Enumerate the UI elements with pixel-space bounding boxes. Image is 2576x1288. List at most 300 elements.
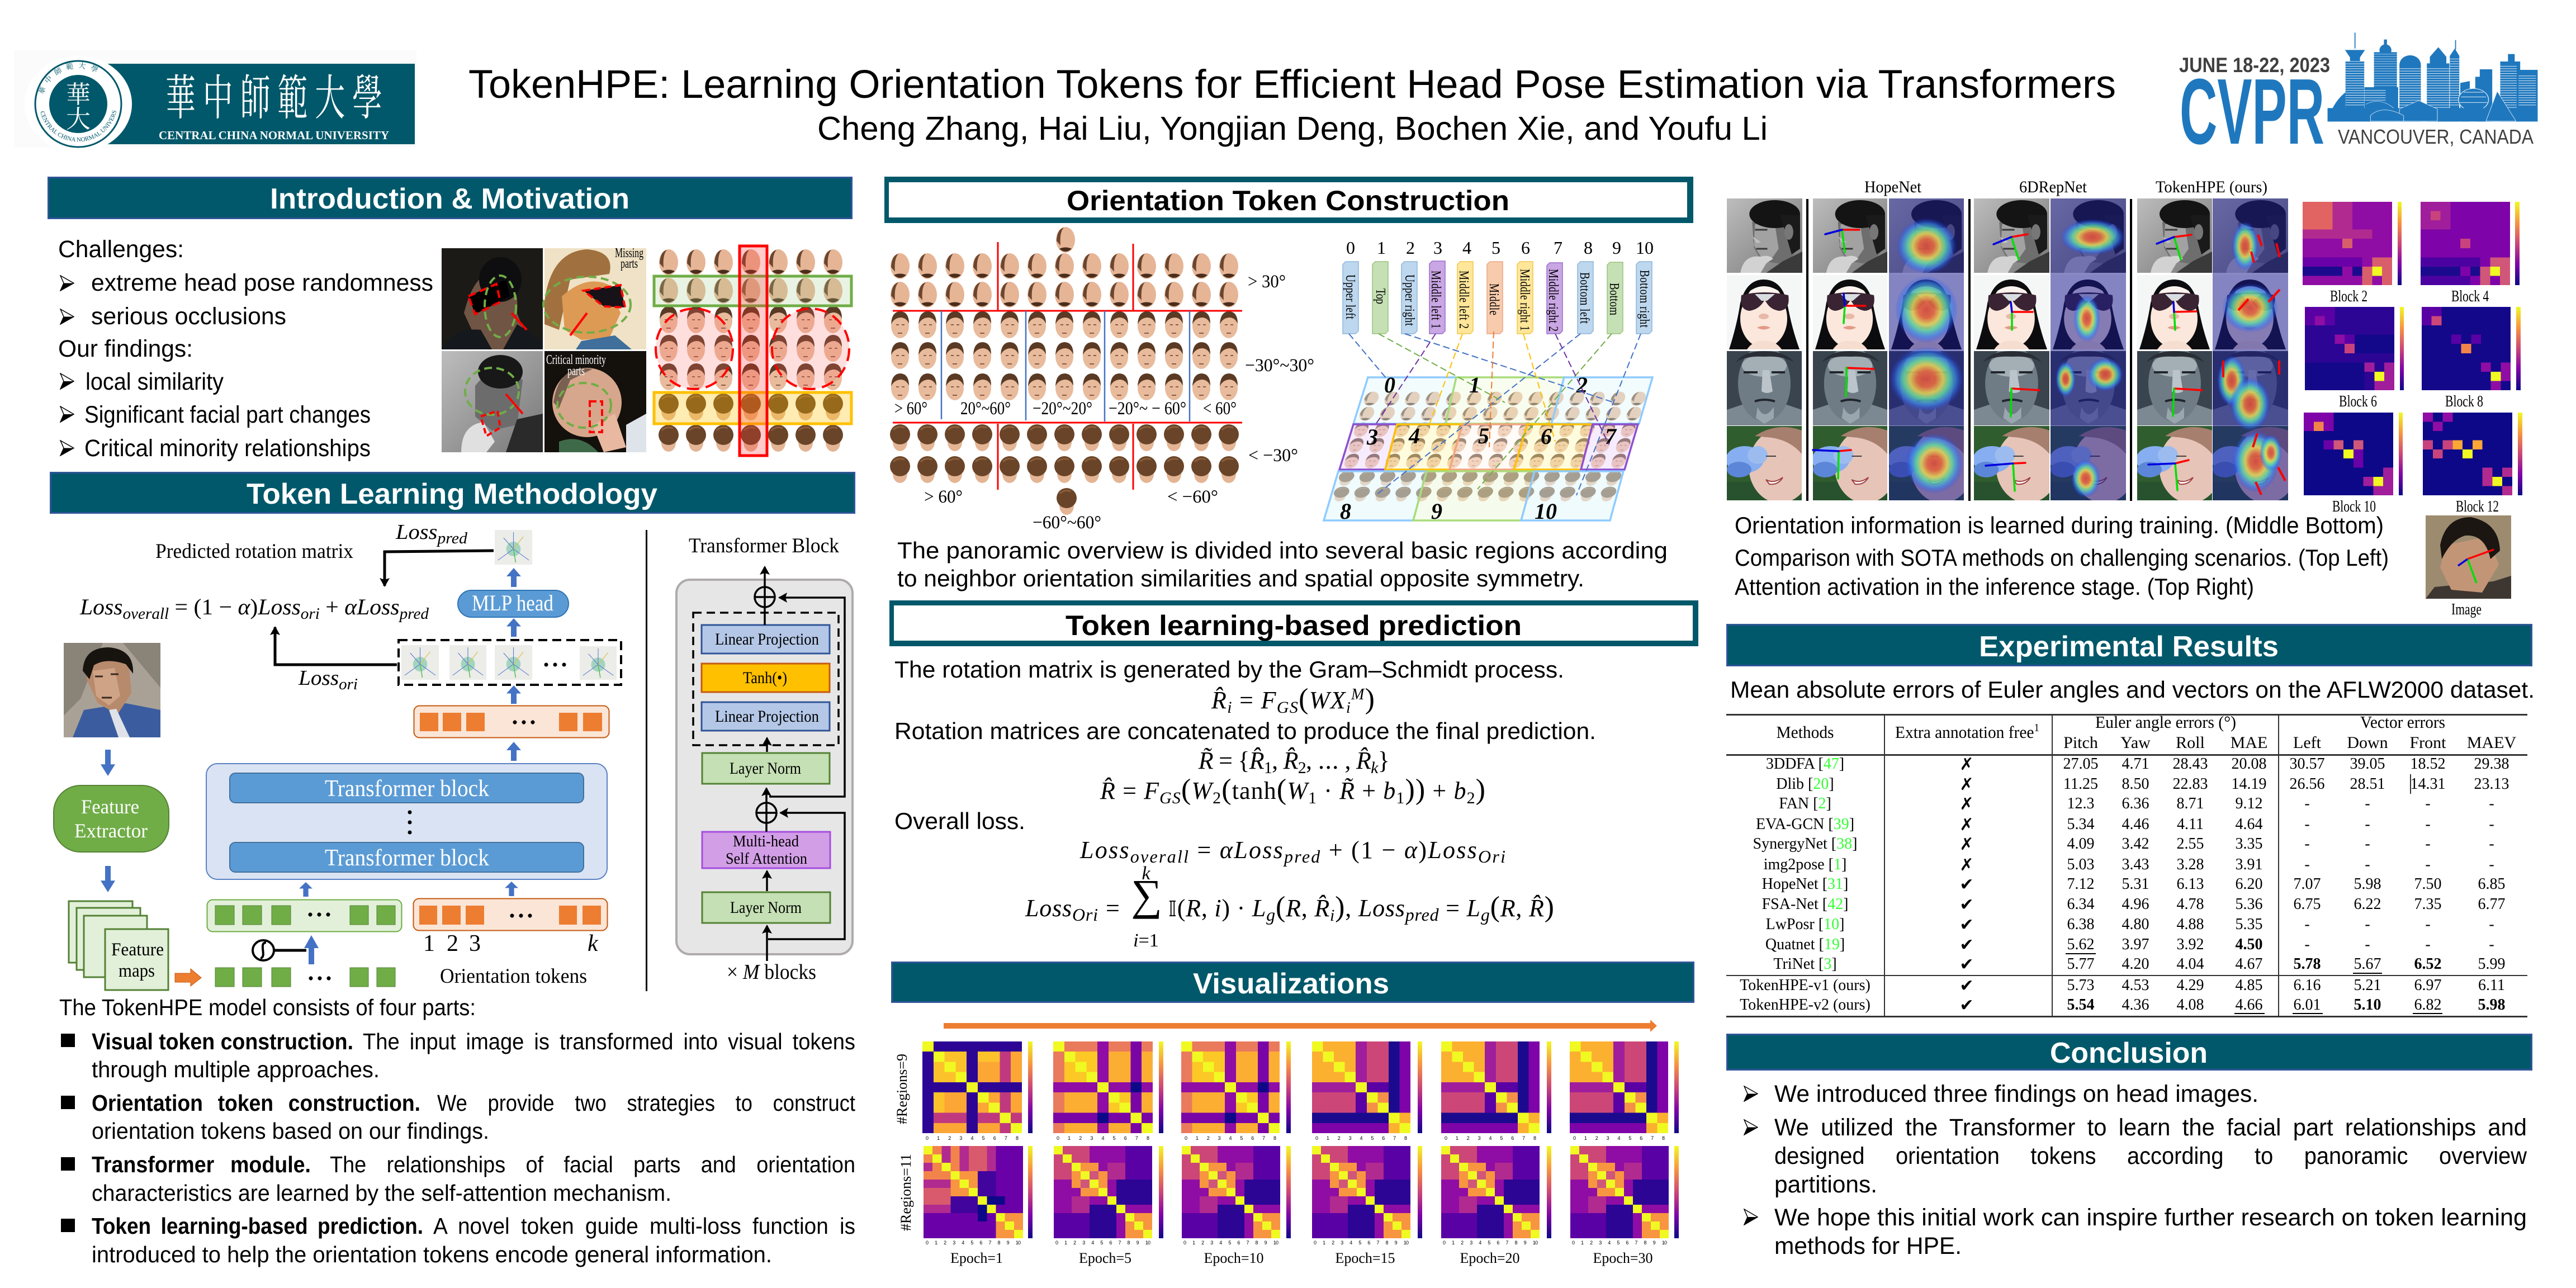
- table: AFLW2000 errors: 6.36: [2122, 795, 2149, 812]
- table: AFLW2000 errors: 4.85: [2235, 977, 2263, 994]
- labels: epochs and regions: #Regions=9: [894, 1054, 910, 1124]
- table: AFLW2000 errors: 4.50: [2235, 936, 2263, 953]
- formula: R hat i: (: [1299, 683, 1308, 715]
- formula: orientation loss: pred: [1404, 905, 1439, 925]
- table: AFLW2000 errors: -: [2365, 856, 2370, 873]
- axis ticks: 0 1 2 3 4 5 6 7 8 9 10: [926, 1240, 1021, 1246]
- table: AFLW2000 errors: 6.16: [2293, 977, 2321, 994]
- box: layer norm 2: Layer Norm: [730, 898, 802, 917]
- figure: region parallelogram: 6: [1541, 424, 1552, 449]
- table: AFLW2000 errors: -: [2489, 835, 2494, 853]
- formula: orientation loss: Ori: [1072, 905, 1098, 925]
- panel: experimental results: [1726, 625, 2535, 1017]
- logo: Central China Normal University: CENTRAL CHINA NORMAL UNIVERSITY: [159, 129, 389, 142]
- labels: angle ranges: > 30°: [1248, 272, 1286, 292]
- formula: orientation loss: (: [1490, 891, 1500, 923]
- text: conclusion bullets: We introduced three findings on head images.: [1774, 1081, 2258, 1107]
- table: AFLW2000 errors: -: [2304, 936, 2310, 953]
- text: model parts: The input image is transformed into visual tokens: [363, 1029, 855, 1054]
- table: AFLW2000 errors: 5.34: [2067, 816, 2094, 833]
- figure: token bars: Bottom right: [1637, 270, 1652, 328]
- table: AFLW2000 errors: img2pose [1]: [1764, 856, 1846, 873]
- figure: token bars: 10: [1636, 238, 1654, 258]
- photo: woman with missing parts: Missing: [615, 246, 643, 261]
- text: panoramic overview caption: [897, 537, 1668, 591]
- table: AFLW2000 errors: -: [2304, 916, 2310, 933]
- table: AFLW2000 errors: ✔: [1959, 976, 1974, 996]
- formula: overall loss: overall: [122, 605, 169, 623]
- label: image: Image: [2451, 601, 2482, 618]
- table: AFLW2000 errors: 5.77: [2067, 955, 2094, 973]
- formula: overall loss: α)Loss: [1404, 836, 1477, 864]
- heatmap: block 12: [2423, 413, 2512, 495]
- heading: introduction: Introduction & Motivation: [270, 183, 629, 215]
- formula: R hat: W: [1191, 777, 1212, 804]
- stack: feature maps: maps: [119, 961, 155, 981]
- attention heatmaps: blocks: [2303, 202, 2522, 495]
- arrow: extractor to maps: [101, 866, 115, 892]
- figure: region parallelogram: 3: [1366, 424, 1378, 449]
- table: AFLW2000 errors: 9.12: [2235, 795, 2263, 812]
- stack: feature maps: [69, 901, 168, 990]
- table: AFLW2000 errors: -: [2425, 916, 2431, 933]
- formula: overall loss: +: [320, 594, 344, 619]
- formula: R hat: ): [1476, 774, 1485, 806]
- table: AFLW2000 errors: 26.56: [2290, 775, 2324, 793]
- logo: CVPR 2023 Vancouver: JUNE 18-22, 2023: [2179, 54, 2330, 77]
- table: AFLW2000 errors: 4.64: [2235, 816, 2263, 833]
- table: AFLW2000 errors: 5.10: [2354, 996, 2381, 1014]
- formula: overall loss: αLoss: [344, 594, 397, 619]
- figure: region parallelogram: 8: [1340, 499, 1351, 524]
- figure: token bars: 4: [1462, 238, 1471, 258]
- text: notes: Comparison with SOTA methods on challenging scenarios. (Top Left): [1735, 544, 2389, 571]
- box: tanh: [702, 664, 830, 692]
- axis ticks: 0 1 2 3 4 5 6 7 8: [1315, 1135, 1407, 1141]
- image: inference portrait with axes: [2426, 515, 2511, 599]
- box: linear projection 1: [702, 625, 830, 654]
- table: AFLW2000 errors: 4.88: [2177, 916, 2204, 933]
- table: AFLW2000 errors: HopeNet [31]: [1762, 875, 1848, 893]
- table: AFLW2000 errors: 4.04: [2177, 955, 2204, 973]
- table: AFLW2000 errors: 5.21: [2354, 977, 2381, 994]
- formula: overall loss: Loss: [80, 594, 121, 619]
- text: table caption: Mean absolute errors of Euler angles and vectors on the AFLW2000 dataset.: [1730, 676, 2535, 703]
- text: panoramic overview caption: to neighbor orientation similarities and spatial opposite symmetry.: [897, 565, 1584, 591]
- formula: R hat: + b: [1432, 777, 1466, 804]
- axis ticks: 0 1 2 3 4 5 6 7 8 9 10: [1183, 1240, 1278, 1246]
- table: AFLW2000 errors: 12.3: [2067, 795, 2094, 812]
- table: AFLW2000 errors: 7.07: [2293, 875, 2321, 893]
- photo: woman with missing parts: [543, 246, 646, 349]
- formula: overall loss: ori: [301, 605, 320, 623]
- table: AFLW2000 errors: 4.08: [2177, 996, 2204, 1014]
- table: AFLW2000 errors: 5.36: [2235, 896, 2263, 913]
- box: linear projection 1: Linear Projection: [715, 630, 819, 648]
- figure: token bars: Upper left: [1343, 274, 1358, 319]
- figure: region parallelogram: 1: [1469, 372, 1480, 397]
- panel: qualitative comparison: [1726, 178, 2522, 618]
- table: AFLW2000 errors: -: [2365, 936, 2370, 953]
- table: AFLW2000 errors: 4.67: [2235, 955, 2263, 973]
- text: challenges and findings: Critical minority relationships: [84, 435, 371, 462]
- box: linear projection 2: [702, 702, 830, 731]
- formula: overall loss: pred: [1283, 846, 1320, 866]
- table: AFLW2000 errors: 3.91: [2235, 856, 2263, 873]
- table: AFLW2000 errors: ✗: [1959, 815, 1974, 835]
- figure: region parallelogram: 7: [1605, 424, 1617, 449]
- labels: block names: Block 12: [2456, 498, 2499, 515]
- heading: conclusion: [1727, 1034, 2531, 1070]
- table: AFLW2000 errors: TriNet [3]: [1773, 955, 1837, 973]
- table: AFLW2000 errors: 4.20: [2122, 955, 2149, 973]
- box: multi-head attention: [702, 832, 830, 868]
- figure: region parallelogram: 2: [1576, 372, 1588, 397]
- table: AFLW2000 errors: 5.99: [2478, 955, 2506, 973]
- table: AFLW2000 errors: 6.77: [2478, 896, 2506, 913]
- table: AFLW2000 errors: -: [2365, 835, 2370, 853]
- table: AFLW2000 errors: 6.75: [2293, 896, 2321, 913]
- figure: token bars: 0: [1346, 238, 1355, 258]
- formula: overall loss: + (1 −: [1322, 836, 1403, 864]
- formula: R hat: (: [1221, 774, 1232, 806]
- label: token indices: k: [588, 931, 599, 956]
- box: layer norm 2: [702, 892, 830, 923]
- panel: visualizations: [892, 963, 1694, 1266]
- arrow: to sphere: [506, 568, 521, 587]
- title: TokenHPE: Learning Orientation Tokens for Efficient Head Pose Estimation via Transformers: [468, 63, 2116, 107]
- labels: angle ranges: −20°~20°: [1033, 399, 1092, 419]
- table: AFLW2000 errors: 6.85: [2478, 875, 2506, 893]
- table: AFLW2000 errors: Euler angle errors (°): [2095, 712, 2236, 732]
- table: AFLW2000 errors: 3.35: [2235, 835, 2263, 853]
- container: grey block: [676, 580, 853, 954]
- figure: token bars: [1343, 238, 1654, 495]
- box: layer norm 1: Layer Norm: [730, 759, 801, 778]
- heading: visualizations: Visualizations: [1193, 968, 1389, 1000]
- photo: baby with critical minority parts: [544, 351, 646, 452]
- text: notes: [1735, 512, 2389, 600]
- text: panoramic overview caption: The panoramic overview is divided into several basic regions according: [897, 537, 1668, 564]
- labels: epochs and regions: Epoch=15: [1335, 1250, 1395, 1266]
- photo: man with sunglasses: [442, 248, 543, 349]
- diagram: transformer block detail: [676, 534, 853, 984]
- labels: angle ranges: [894, 272, 1314, 533]
- logo: Central China Normal University: 華: [66, 74, 91, 110]
- arrow: visual tokens up: [299, 882, 312, 897]
- formula: R hat i: i: [1346, 699, 1351, 717]
- formula: orientation loss: [1025, 863, 1554, 951]
- table: AFLW2000 errors: 3.97: [2122, 936, 2149, 953]
- text: challenges and findings: Challenges:: [58, 236, 184, 263]
- table: AFLW2000 errors: 5.67: [2354, 955, 2381, 973]
- text: model parts: Orientation token construction.: [92, 1090, 420, 1116]
- table: AFLW2000 errors: -: [2365, 816, 2370, 833]
- figure: token bars: 3: [1433, 238, 1442, 258]
- table: AFLW2000 errors: 4.80: [2122, 916, 2149, 933]
- table: AFLW2000 errors: 2.55: [2177, 835, 2204, 853]
- table: AFLW2000 errors: -: [2304, 856, 2310, 873]
- box: transformer blocks: Transformer block: [325, 776, 489, 802]
- heading: orientation token construction: Orientation Token Construction: [1067, 185, 1509, 216]
- table: AFLW2000 errors: 4.36: [2122, 996, 2149, 1014]
- table: AFLW2000 errors: 5.73: [2067, 977, 2094, 994]
- labels: epochs and regions: Epoch=5: [1079, 1250, 1131, 1266]
- text: model parts: introduced to help the orientation tokens encode general information.: [92, 1242, 772, 1267]
- formula: R hat i: ): [1365, 683, 1375, 715]
- text: overall loss: Overall loss.: [894, 808, 1025, 834]
- box: feature extractor: Feature: [81, 795, 139, 818]
- table: AFLW2000 errors: 6.01: [2293, 996, 2321, 1014]
- formula: orientation loss: Loss: [1025, 894, 1072, 922]
- formula: R tilde: R̂: [1356, 747, 1371, 774]
- table: AFLW2000 errors: 29.38: [2474, 755, 2509, 773]
- formula: R hat i: GS: [1277, 698, 1298, 717]
- heatmap: block 6: [2305, 307, 2394, 390]
- labels: angle ranges: −60°~60°: [1033, 513, 1101, 533]
- table: AFLW2000 errors: Quatnet [19]: [1765, 936, 1845, 953]
- photo: woman with missing parts: parts: [621, 257, 638, 271]
- figure: region parallelogram: 0: [1384, 372, 1395, 397]
- table: AFLW2000 errors: 6.11: [2478, 977, 2505, 994]
- formula: orientation loss: (: [1276, 891, 1285, 923]
- text: model parts: characteristics are learned by the self-attention mechanism.: [92, 1180, 671, 1206]
- figure: token bars: 1: [1377, 238, 1386, 258]
- formula: orientation loss: i=1: [1133, 930, 1159, 951]
- text: challenges and findings: Significant facial part changes: [84, 401, 371, 428]
- arrow: loss ori feedback: [275, 627, 397, 665]
- logo: Central China Normal University: 華中師範大學: [165, 59, 382, 129]
- heading: methodology: [50, 473, 854, 513]
- text: model parts: Visual token construction.: [92, 1029, 353, 1054]
- text: challenges and findings: extreme head pose randomness: [91, 269, 433, 296]
- heading: conclusion: Conclusion: [2050, 1037, 2208, 1069]
- table: AFLW2000 errors: 6.13: [2177, 875, 2204, 893]
- table: AFLW2000 errors: ✔: [1959, 895, 1974, 915]
- formula: R hat i: M: [1351, 686, 1365, 703]
- formula: R tilde: R̂: [1284, 747, 1298, 774]
- table: AFLW2000 errors: ✔: [1959, 935, 1974, 955]
- figure: token bars: Middle right 2: [1546, 269, 1561, 332]
- box: feature extractor: Extractor: [74, 820, 148, 842]
- table: AFLW2000 errors: 5.98: [2478, 996, 2506, 1014]
- arrow: orientation tokens up: [505, 882, 518, 896]
- table: AFLW2000 errors: 6.20: [2235, 875, 2263, 893]
- axis ticks: 0 1 2 3 4 5 6 7 8: [1057, 1135, 1149, 1141]
- arrow: patches orange: [175, 969, 201, 986]
- logo: CVPR 2023 Vancouver: [2179, 32, 2537, 164]
- labels: methods: TokenHPE (ours): [2156, 178, 2267, 196]
- formula: R hat: R̃ + b: [1339, 777, 1395, 804]
- table: AFLW2000 errors: 3.42: [2122, 835, 2149, 853]
- table: AFLW2000 errors: Yaw: [2120, 733, 2151, 752]
- table: AFLW2000 errors: MAE: [2231, 733, 2267, 752]
- table: AFLW2000 errors: 4.11: [2177, 816, 2204, 833]
- heading: experimental results: Experimental Results: [1979, 631, 2279, 663]
- axis ticks: [926, 1135, 1667, 1246]
- labels: methods: HopeNet: [1864, 178, 1922, 196]
- panel: conclusion: [1727, 1034, 2531, 1259]
- figure: token bars: 2: [1406, 238, 1415, 258]
- box: feature extractor: [54, 785, 169, 852]
- labels: angle ranges: < −60°: [1167, 487, 1218, 507]
- axis ticks: 0 1 2 3 4 5 6 7 8: [1445, 1135, 1536, 1141]
- arrow: epoch progression: [944, 1020, 1657, 1032]
- table: AFLW2000 errors: 8.71: [2177, 795, 2204, 812]
- table: AFLW2000 errors: 30.57: [2290, 755, 2324, 773]
- table: AFLW2000 errors: ✗: [1959, 755, 1974, 774]
- heading: introduction: [48, 178, 852, 218]
- text: notes: Attention activation in the inference stage. (Top Right): [1735, 574, 2254, 600]
- labels: angle ranges: −20°~ − 60°: [1109, 399, 1186, 419]
- divider: [646, 530, 647, 991]
- table: AFLW2000 errors: -: [2489, 916, 2494, 933]
- heatmap: block 10: [2304, 413, 2393, 495]
- photo: baby with critical minority parts: Critical minority: [546, 353, 606, 367]
- box: multi-head attention: Self Attention: [726, 850, 807, 868]
- formula: R tilde: R̃ = {R̂: [1199, 747, 1265, 774]
- box: layer norm 1: [702, 753, 830, 784]
- arrow: portrait to extractor: [101, 750, 115, 776]
- table: AFLW2000 errors: -: [2365, 795, 2370, 812]
- arrow: to MLP head: [506, 618, 521, 637]
- labels: epochs and regions: Epoch=30: [1593, 1250, 1653, 1266]
- table: AFLW2000 errors: 39.05: [2350, 755, 2385, 773]
- panel: token learning-based prediction: [889, 600, 1698, 951]
- arrow: loss pred feedback: [385, 551, 494, 586]
- table: AFLW2000 errors: 20.08: [2232, 755, 2266, 773]
- diagram: overall pipeline: [54, 520, 621, 990]
- formula: R hat i: i: [1227, 698, 1232, 717]
- text: conclusion bullets: [1744, 1081, 2527, 1259]
- labels: epochs and regions: #Regions=11: [898, 1154, 914, 1231]
- heading: prediction: [889, 600, 1698, 646]
- figure: token bars: Bottom: [1607, 283, 1622, 315]
- table: AFLW2000 errors: LwPosr [10]: [1766, 916, 1844, 933]
- formula: R hat: R̂ = F: [1100, 777, 1159, 804]
- table: AFLW2000 errors: SynergyNet [38]: [1753, 835, 1857, 853]
- label: orientation tokens: Orientation tokens: [440, 965, 587, 988]
- panel: orientation token construction: [884, 177, 1693, 591]
- figure: token bars: 5: [1491, 238, 1500, 258]
- formula: orientation loss: g: [1481, 905, 1490, 925]
- table: AFLW2000 errors: 5.62: [2067, 936, 2094, 953]
- tokens: input orientation: [414, 899, 607, 930]
- figure: token bars: 8: [1584, 238, 1593, 258]
- table: AFLW2000 errors: [1726, 712, 2527, 1017]
- figure: region parallelogram: 9: [1431, 499, 1442, 524]
- text: challenges and findings: [58, 236, 433, 462]
- formula: overall loss: pred: [399, 605, 429, 623]
- table: AFLW2000 errors: Methods: [1777, 722, 1834, 742]
- table: AFLW2000 errors: 7.35: [2414, 896, 2442, 913]
- label: predicted rotation matrix: Predicted rotation matrix: [155, 540, 353, 563]
- formula: R hat: 2: [1467, 789, 1475, 807]
- logo: CVPR 2023 Vancouver: VANCOUVER, CANADA: [2338, 125, 2534, 148]
- formula: R tilde: 1: [1264, 759, 1272, 777]
- figure: token bars: Middle left 1: [1428, 271, 1443, 329]
- table: AFLW2000 errors: 18.52: [2411, 755, 2445, 773]
- table: AFLW2000 errors: 8.50: [2122, 775, 2149, 793]
- formula: orientation loss: i: [1330, 906, 1334, 925]
- table: AFLW2000 errors: Front: [2409, 733, 2446, 752]
- table: AFLW2000 errors: 4.96: [2122, 896, 2149, 913]
- table: AFLW2000 errors: Left: [2293, 733, 2322, 752]
- formula: R tilde: , ⋯ ,: [1306, 747, 1357, 774]
- table: AFLW2000 errors: Vector errors: [2360, 712, 2445, 732]
- formula: R hat: tanh(W: [1232, 774, 1308, 806]
- table: AFLW2000 errors: -: [2304, 795, 2310, 812]
- table: AFLW2000 errors: 4.53: [2122, 977, 2149, 994]
- table: AFLW2000 errors: 6.34: [2067, 896, 2094, 913]
- formula: overall loss: αLoss: [1220, 836, 1283, 864]
- figure: head pose grid: [654, 246, 851, 456]
- table: AFLW2000 errors: -: [2425, 835, 2431, 853]
- table: AFLW2000 errors: 14.19: [2232, 775, 2266, 793]
- axis ticks: 0 1 2 3 4 5 6 7 8 9 10: [1572, 1240, 1667, 1246]
- text: challenges and findings: Our findings:: [58, 335, 193, 362]
- formula: R tilde: }: [1378, 747, 1390, 774]
- labels: angle ranges: > 60°: [924, 487, 963, 507]
- box: tanh: Tanh(•): [743, 669, 787, 687]
- axis ticks: 0 1 2 3 4 5 6 7 8 9 10: [1314, 1240, 1409, 1246]
- heatmap: block 4: [2421, 202, 2510, 285]
- label: token indices: [423, 931, 599, 956]
- text: notes: Orientation information is learned during training. (Middle Bottom): [1735, 512, 2384, 538]
- table: AFLW2000 errors: -: [2425, 795, 2431, 812]
- table: AFLW2000 errors: TokenHPE-v1 (ours): [1740, 977, 1871, 994]
- table: AFLW2000 errors: FAN [2]: [1779, 795, 1831, 812]
- table: AFLW2000 errors: TokenHPE-v2 (ours): [1740, 996, 1871, 1014]
- table: AFLW2000 errors: 5.31: [2122, 875, 2149, 893]
- label: transformer block: Transformer Block: [689, 534, 839, 557]
- image grid: input faces and poses: [1726, 198, 2222, 503]
- figure: region parallelogram: 4: [1408, 423, 1420, 448]
- table: AFLW2000 errors: 4.29: [2177, 977, 2204, 994]
- figure: token bars: Top: [1373, 288, 1388, 304]
- formula: orientation loss: =: [1439, 894, 1466, 922]
- box: MLP head: MLP head: [472, 590, 553, 615]
- table: AFLW2000 errors: 5.03: [2067, 856, 2094, 873]
- table: AFLW2000 errors: 4.78: [2177, 896, 2204, 913]
- arrow: to output tokens: [506, 742, 521, 761]
- logo: Central China Normal University: 華中師範大學: [38, 62, 98, 94]
- heatmaps: eleven regions: [924, 1146, 1679, 1238]
- table: AFLW2000 errors: 28.43: [2172, 755, 2208, 773]
- label: loss ori: Loss: [299, 666, 338, 690]
- labels: methods: [1864, 178, 2267, 196]
- arrow: to predictions: [506, 685, 521, 704]
- table: AFLW2000 errors: 3.92: [2177, 936, 2204, 953]
- formula: overall loss: = (1 −: [169, 594, 238, 619]
- table: AFLW2000 errors: 5.35: [2235, 916, 2263, 933]
- heading: experimental results: [1727, 625, 2531, 665]
- text: model parts: [59, 995, 856, 1267]
- labels: block names: Block 4: [2451, 288, 2489, 305]
- table: AFLW2000 errors: ✗: [1959, 855, 1974, 875]
- text: model parts: A novel token guide multi-loss function is: [433, 1213, 855, 1239]
- heading: prediction: Token learning-based prediction: [1066, 610, 1522, 641]
- table: AFLW2000 errors: 3.43: [2122, 856, 2149, 873]
- table: AFLW2000 errors: 27.05: [2063, 755, 2099, 773]
- panel: introduction and motivation: [48, 178, 852, 462]
- formula: orientation loss: , Loss: [1345, 894, 1405, 922]
- table: AFLW2000 errors: 5.54: [2067, 996, 2094, 1014]
- formula: R hat i: WX: [1309, 686, 1346, 714]
- figure: token bars: Middle left 2: [1456, 271, 1471, 329]
- text: model parts: The relationships of facial parts and orientation: [330, 1152, 855, 1177]
- heatmaps: nine regions: [922, 1041, 1679, 1133]
